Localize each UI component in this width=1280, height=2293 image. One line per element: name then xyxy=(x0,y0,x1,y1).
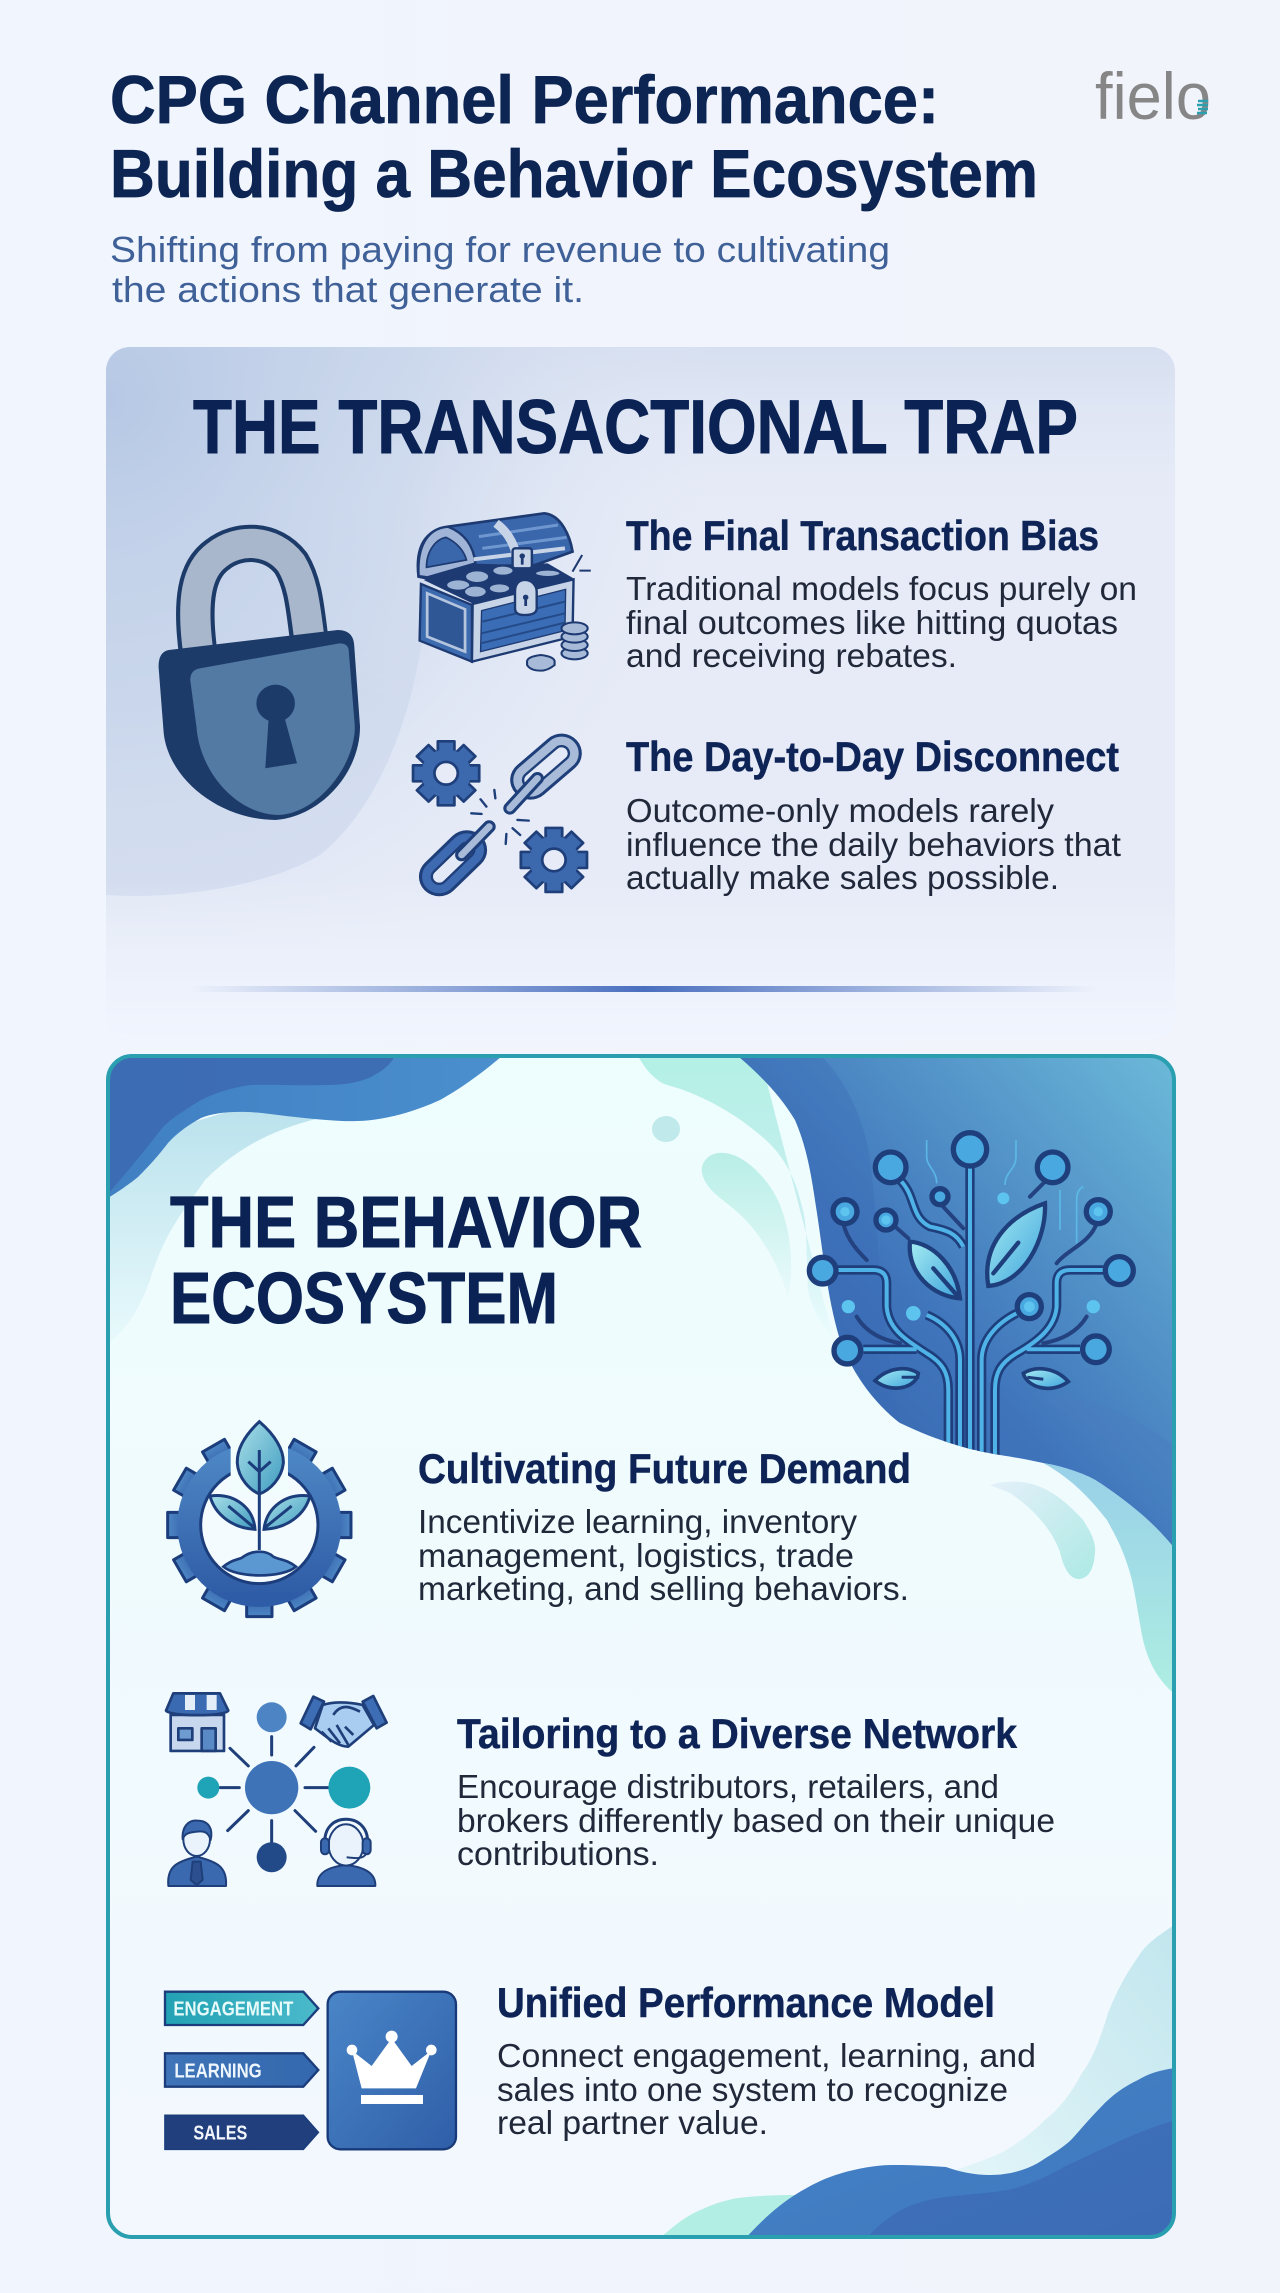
wave: top-left blue xyxy=(100,1056,502,1203)
arrow: engagement xyxy=(165,1992,318,2025)
text: day-to-day body: actually make sales possible. xyxy=(626,859,1059,896)
icon: businessperson xyxy=(168,1821,226,1886)
icon: circuit tree xyxy=(809,1133,1133,1460)
heading: the behavior ecosystem xyxy=(170,1183,642,1339)
icon: gear with plant xyxy=(168,1422,351,1617)
arrow: learning xyxy=(165,2053,318,2087)
text: cultivating body: Incentivize learning, inventory xyxy=(418,1503,857,1540)
icon: treasure chest xyxy=(418,513,591,671)
arrow: engagement: ENGAGEMENT xyxy=(173,1998,294,2021)
panel: the behavior ecosystem xyxy=(100,1056,1180,2240)
icon: shop xyxy=(166,1693,228,1751)
text: cultivating body xyxy=(418,1503,909,1607)
text: final transaction body: Traditional models focus purely on xyxy=(626,570,1137,607)
droplet xyxy=(652,1116,680,1142)
heading: cultivating future demand: Cultivating Future Demand xyxy=(418,1445,911,1492)
text: unified body: sales into one system to recognize xyxy=(497,2071,1008,2108)
heading: the day-to-day disconnect: The Day-to-Day Disconnect xyxy=(626,733,1119,780)
wave: bottom teal xyxy=(664,2195,794,2235)
heading: tailoring to a diverse network: Tailoring to a Diverse Network xyxy=(457,1710,1018,1757)
title xyxy=(110,62,1038,212)
text: cultivating body: management, logistics, trade xyxy=(418,1537,854,1574)
heading: the behavior ecosystem: THE BEHAVIOR xyxy=(170,1183,642,1263)
crown tile xyxy=(328,1992,456,2149)
text: final transaction body: and receiving rebates. xyxy=(626,637,957,674)
icon: padlock xyxy=(159,543,360,820)
text: unified body xyxy=(497,2037,1036,2141)
heading: the behavior ecosystem: ECOSYSTEM xyxy=(170,1259,558,1339)
wave: right teal xyxy=(1043,1463,1176,1695)
icon: broken chain and gears xyxy=(413,741,587,892)
network hub xyxy=(197,1702,370,1872)
text: final transaction body: final outcomes like hitting quotas xyxy=(626,604,1118,641)
icon: support agent xyxy=(317,1819,375,1886)
swoosh: right xyxy=(990,1482,1095,1579)
arrow: sales: SALES xyxy=(193,2121,247,2144)
text: day-to-day body xyxy=(626,792,1121,896)
wave: bottom blue xyxy=(744,2068,1176,2240)
title: CPG Channel Performance: xyxy=(110,62,939,138)
panel border xyxy=(108,1056,1174,2237)
text: tailoring body xyxy=(457,1768,1055,1872)
wave: top-left pale xyxy=(110,1112,316,1340)
text: final transaction body xyxy=(626,570,1137,674)
wave: bottom-right pale xyxy=(956,1926,1172,2175)
arrow: learning: LEARNING xyxy=(174,2060,262,2083)
heading: the transactional trap: THE TRANSACTIONAL TRAP xyxy=(193,385,1078,470)
wave: top-right blue xyxy=(738,1056,1180,1552)
text: tailoring body: contributions. xyxy=(457,1835,659,1872)
swoosh: small blob xyxy=(702,1153,791,1297)
panel: the transactional trap xyxy=(106,347,1175,934)
icon: handshake xyxy=(301,1696,387,1747)
text: unified body: Connect engagement, learning, and xyxy=(497,2037,1036,2074)
text: tailoring body: Encourage distributors, retailers, and xyxy=(457,1768,999,1805)
text: unified body: real partner value. xyxy=(497,2104,768,2141)
icon: unified model arrows and crown xyxy=(165,1992,456,2149)
heading: the final transaction bias: The Final Transaction Bias xyxy=(626,512,1099,559)
text: day-to-day body: Outcome-only models rarely xyxy=(626,792,1055,829)
arrow: sales xyxy=(165,2115,318,2149)
logo: fielo: fielo xyxy=(1095,59,1211,133)
heading: unified performance model: Unified Performance Model xyxy=(497,1979,995,2026)
title: Building a Behavior Ecosystem xyxy=(110,136,1038,212)
text: cultivating body: marketing, and selling behaviors. xyxy=(418,1570,909,1607)
icon: partner network xyxy=(166,1693,387,1886)
subtitle xyxy=(110,229,890,310)
subtitle: Shifting from paying for revenue to cultivating xyxy=(110,229,890,270)
subtitle: the actions that generate it. xyxy=(112,269,584,310)
text: tailoring body: brokers differently based on their unique xyxy=(457,1802,1055,1839)
wave: top-right teal xyxy=(639,1058,828,1322)
text: day-to-day body: influence the daily behaviors that xyxy=(626,826,1121,863)
